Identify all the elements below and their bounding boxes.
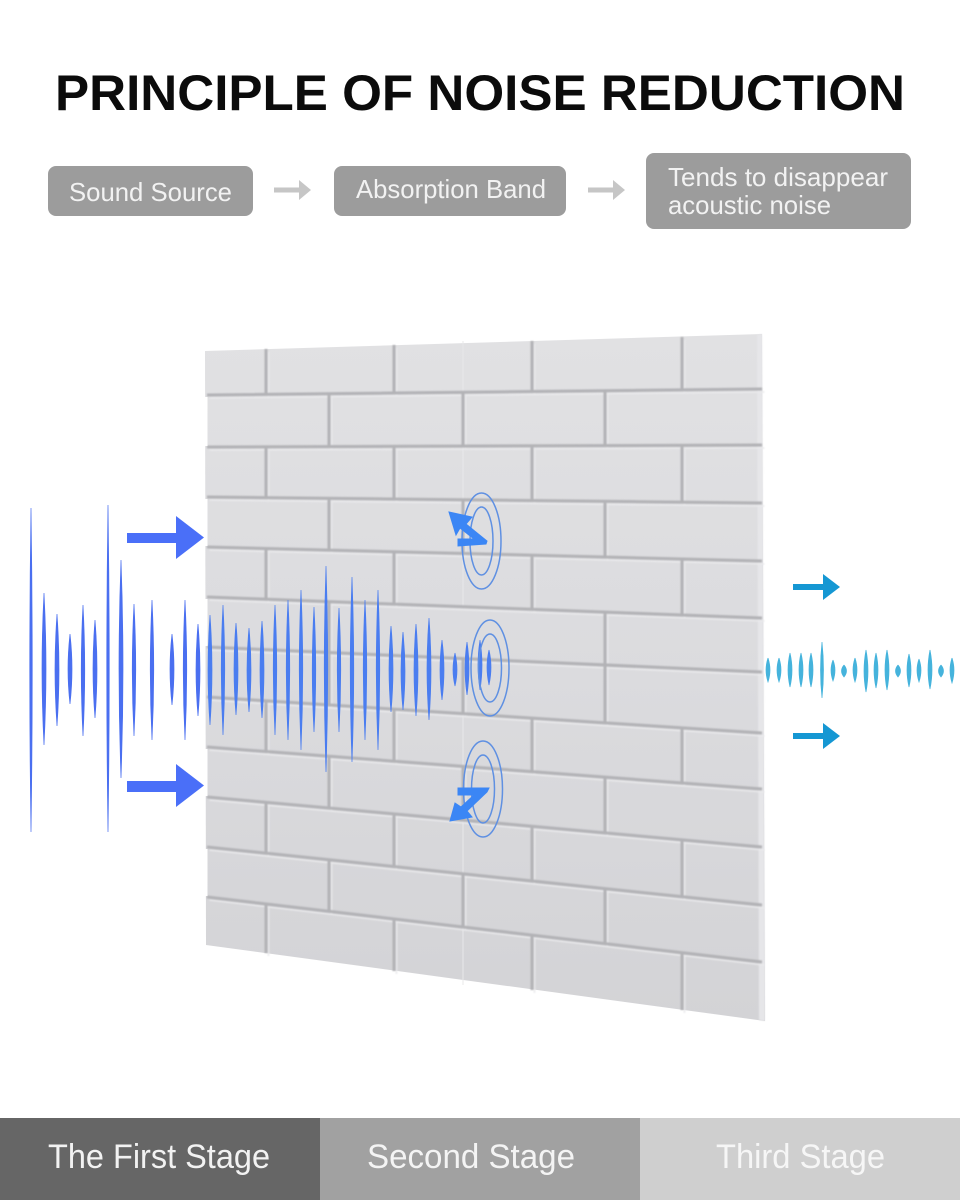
step: noise disappears: [646, 153, 911, 229]
step: noise disappears: acoustic noise: [668, 190, 831, 220]
arrow: outgoing top: [793, 574, 840, 600]
absorption rings: top: [462, 493, 501, 589]
arrow: incoming bottom: [127, 764, 204, 807]
step: noise disappears: Tends to disappear: [668, 162, 888, 192]
stage one: [0, 1118, 320, 1200]
reflected arrows: top: [449, 512, 487, 546]
step: absorption band: Absorption Band: [356, 174, 546, 204]
step: sound source: Sound Source: [69, 177, 232, 207]
arrow: outgoing bottom: [793, 723, 840, 749]
stage bar: [0, 1118, 960, 1200]
stage one: The First Stage: [48, 1138, 270, 1176]
title: PRINCIPLE OF NOISE REDUCTION: [55, 65, 905, 121]
absorption rings: middle: [471, 620, 509, 716]
arrow: source to band: [274, 180, 311, 200]
stage three: Third Stage: [716, 1138, 885, 1176]
arrow: incoming top: [127, 516, 204, 559]
stage two: [320, 1118, 640, 1200]
incoming sound wave: [30, 505, 491, 832]
stage two: Second Stage: [367, 1138, 575, 1176]
step: sound source: [48, 166, 253, 216]
brick absorption panel: [204, 334, 765, 1021]
stage three: [640, 1118, 960, 1200]
process flow: [48, 153, 911, 229]
absorption rings: bottom: [464, 741, 502, 837]
reflected arrows: bottom: [450, 788, 489, 821]
arrow: band to result: [588, 180, 625, 200]
reduced sound wave: [766, 642, 954, 698]
step: absorption band: [334, 166, 566, 216]
